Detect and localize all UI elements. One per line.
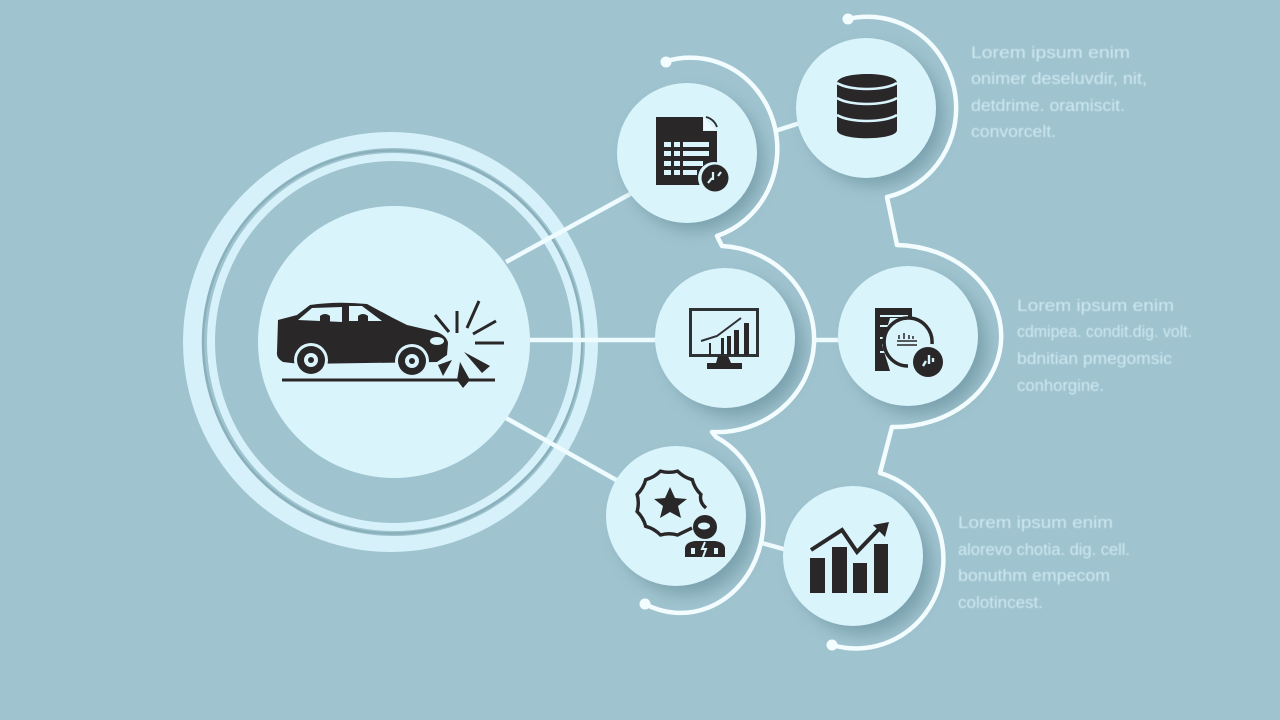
text block: bottom: alorevo chotia. dig. cell. [958, 540, 1130, 559]
node: document with table [617, 83, 757, 223]
text block: top: convorcelt. [971, 122, 1056, 141]
icon: monitor with rising chart [690, 310, 758, 369]
node: database [796, 38, 936, 178]
text block: middle: cdmipea. condit.dig. volt. [1017, 322, 1192, 341]
central target rings [183, 132, 598, 552]
text block: bottom: Lorem ipsum enim [958, 513, 1113, 532]
text block: top: Lorem ipsum enim [971, 43, 1130, 62]
text block: middle: Lorem ipsum enim [1017, 296, 1174, 315]
icon: star badge with expert [637, 471, 725, 557]
text block: top: onimer deseluvdir, nit, [971, 69, 1147, 88]
text block: middle: bdnitian pmegomsic [1017, 349, 1172, 368]
icon: document and gauge [875, 308, 945, 379]
text block: top [971, 43, 1147, 141]
text block: bottom: bonuthm empecom [958, 566, 1110, 585]
node shadows [618, 49, 986, 634]
text block: bottom [958, 513, 1130, 612]
node: document with gauge [838, 266, 978, 406]
left bracket arcs [645, 58, 814, 613]
icon: database stack [837, 74, 897, 138]
icon: report document [656, 117, 730, 194]
text block: middle [1017, 296, 1192, 395]
arc end dots [640, 14, 854, 650]
right bracket arcs [832, 17, 1001, 648]
node: star badge and person [606, 446, 746, 586]
text block: middle: conhorgine. [1017, 376, 1104, 395]
connector lines from hub to nodes [506, 123, 840, 550]
text block: top: detdrime. oramiscit. [971, 96, 1125, 115]
text block: bottom: colotincest. [958, 593, 1043, 612]
icon: bars with trend arrow [810, 522, 889, 593]
node: monitor chart [655, 268, 795, 408]
hub disc with car crash icon [258, 206, 530, 478]
node: bar chart [783, 486, 923, 626]
icon: crashed car [277, 301, 504, 388]
